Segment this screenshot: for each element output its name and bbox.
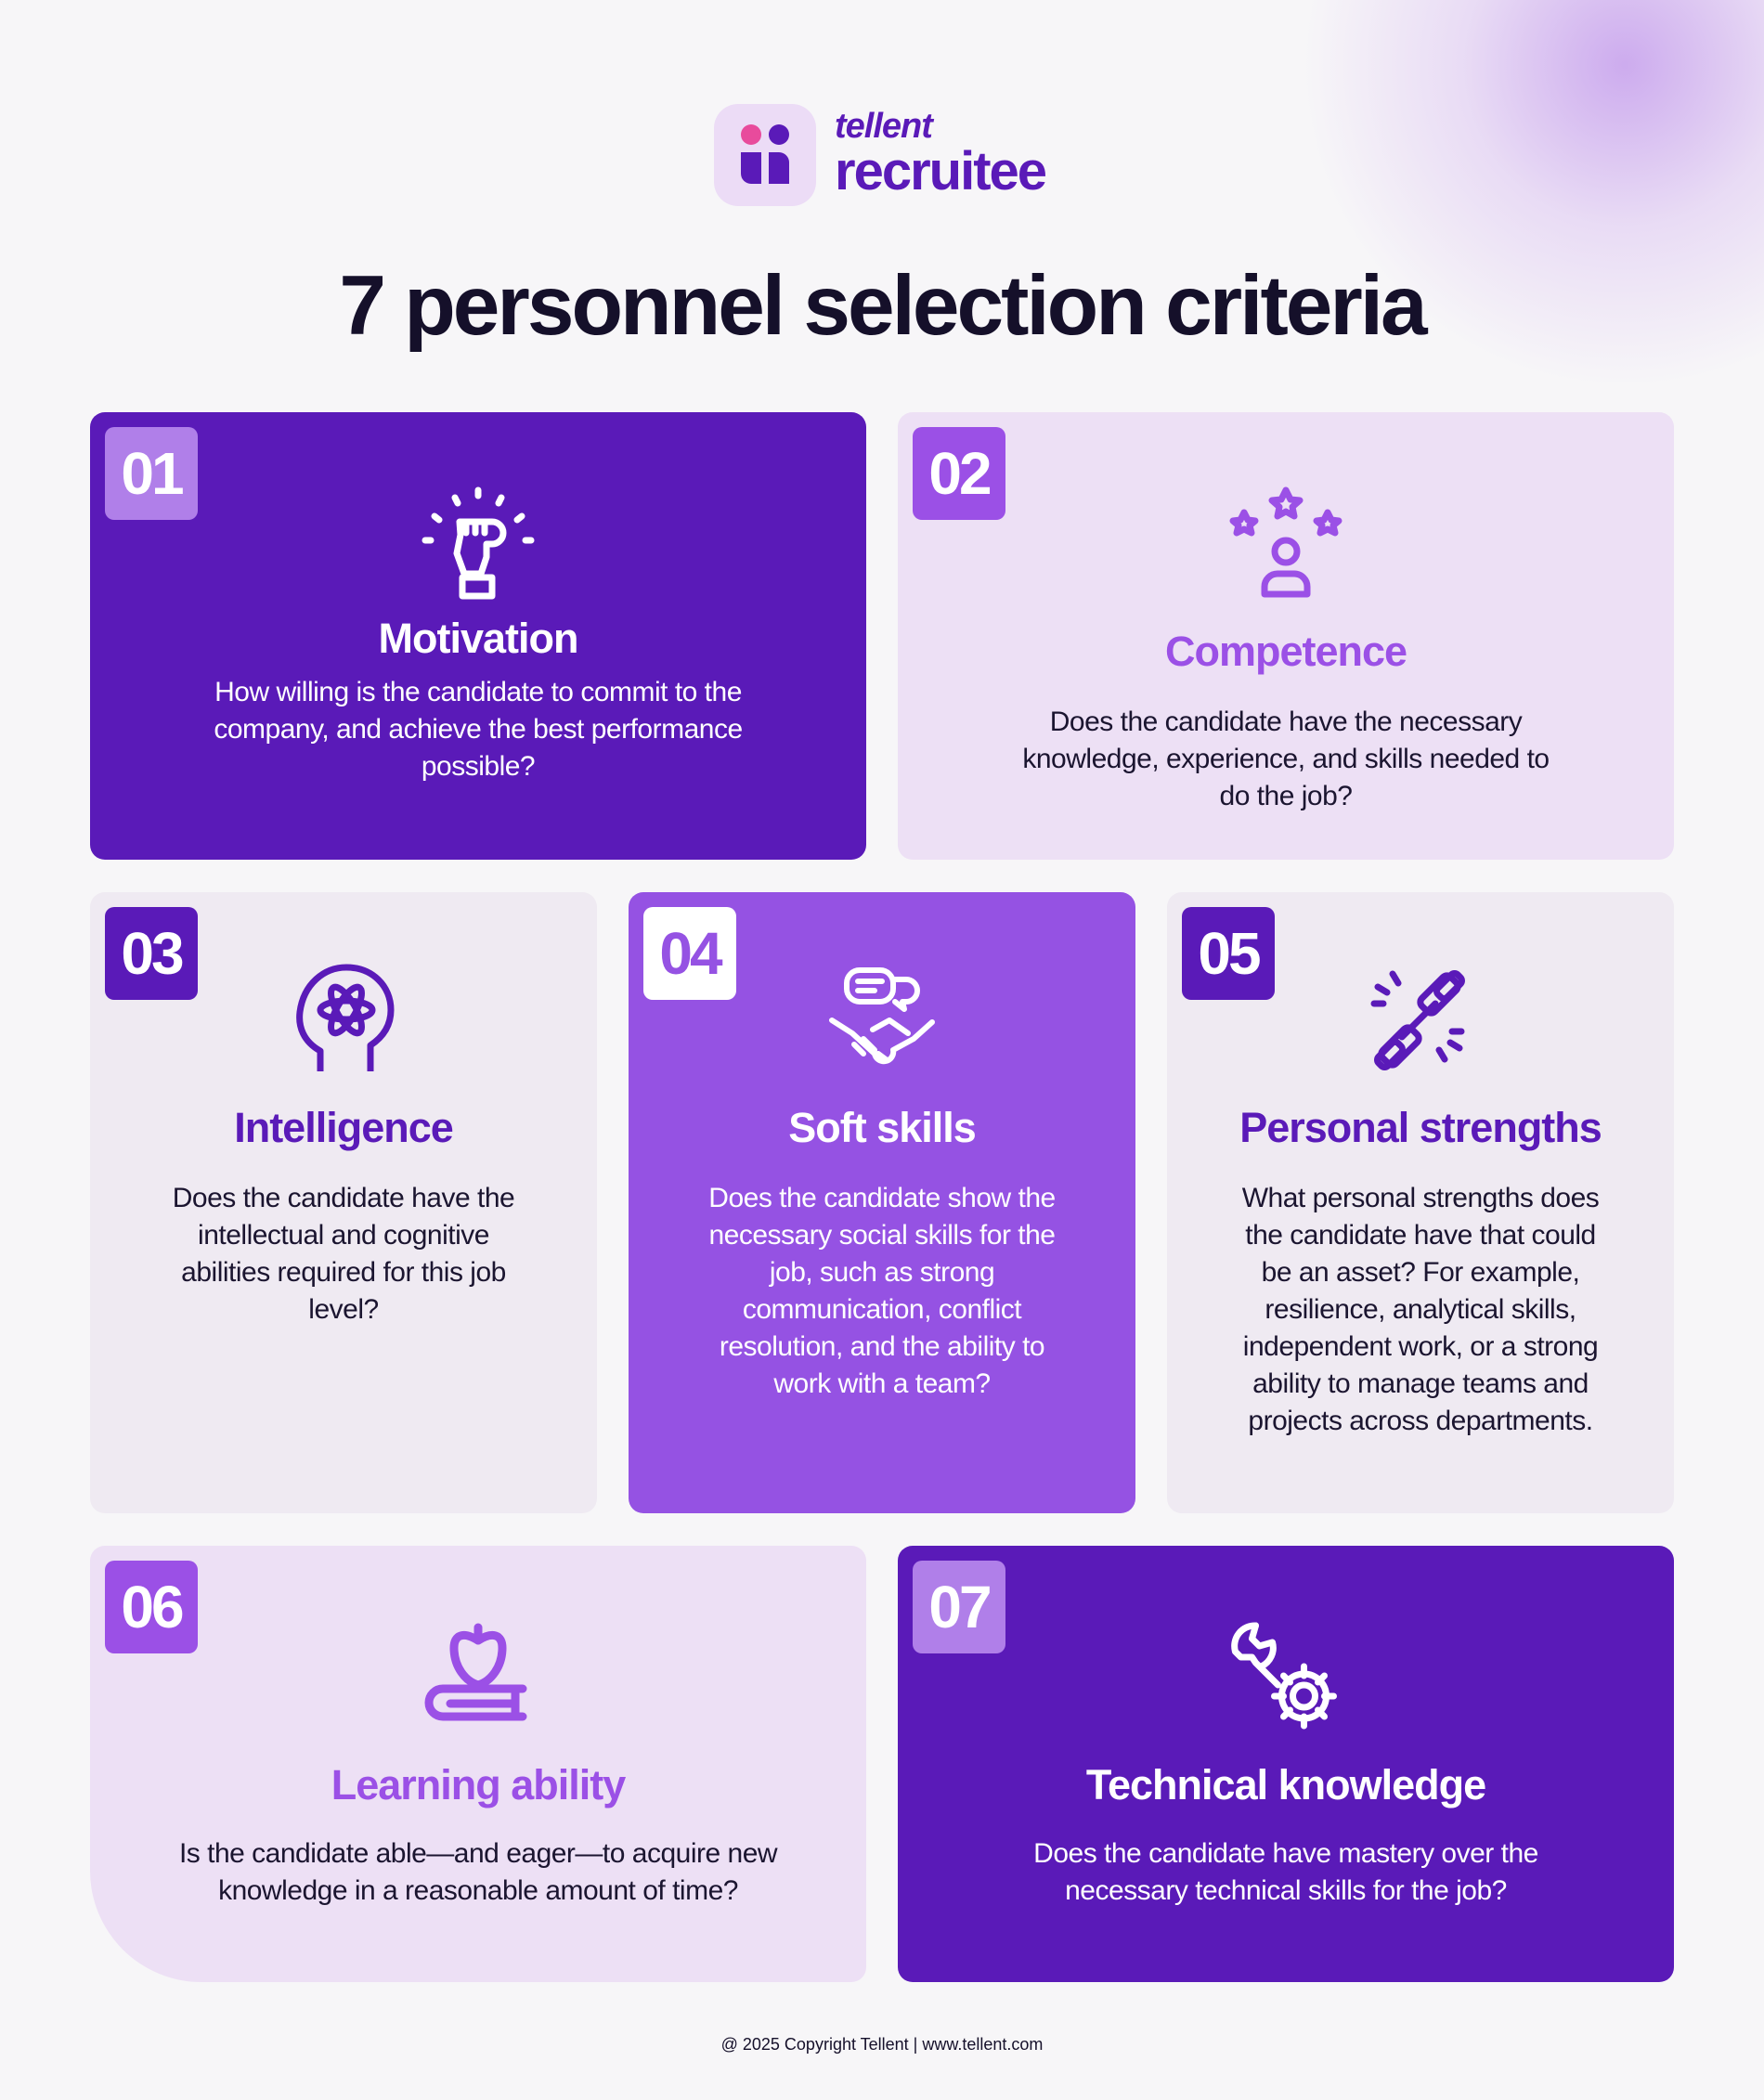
heading: Learning ability — [331, 1761, 625, 1808]
logo text: recruitee — [835, 141, 1045, 201]
text: How willing is the candidate to commit to the company, and achieve the best performance possible? — [214, 677, 743, 782]
logo — [714, 104, 1045, 206]
icon: apple on book — [425, 1623, 527, 1721]
badge 01 — [105, 427, 198, 520]
badge 03 — [105, 907, 198, 1000]
heading: Competence — [1165, 628, 1407, 675]
heading: Motivation — [379, 615, 577, 662]
text: Does the candidate have the intellectual and cognitive abilities required for this job level? — [173, 1183, 514, 1325]
panel: 03 Intelligence — [90, 892, 597, 1513]
footer: @ 2025 Copyright Tellent | www.tellent.com — [721, 2035, 1043, 2054]
badge 07 — [913, 1561, 1005, 1653]
badge 04: 04 — [659, 920, 720, 987]
badge 02: 02 — [928, 440, 990, 507]
badge 04 — [643, 907, 736, 1000]
badge 01: 01 — [121, 440, 182, 507]
text: Does the candidate have mastery over the necessary technical skills for the job? — [1033, 1838, 1538, 1906]
icon: handshake with chat — [829, 967, 935, 1064]
panel: 07 Technical knowledge — [898, 1546, 1674, 1982]
icon: fist — [422, 486, 535, 600]
heading: Technical knowledge — [1086, 1761, 1485, 1808]
text: Is the candidate able—and eager—to acquire new knowledge in a reasonable amount of time? — [179, 1838, 777, 1906]
icon: person with stars — [1229, 486, 1342, 598]
text: What personal strengths does the candidate have that could be an asset? For example, resilience, analytical skills, independent work, or a strong ability to manage teams and projects across departments. — [1242, 1183, 1599, 1436]
heading: Intelligence — [234, 1104, 453, 1151]
logo text — [835, 107, 1045, 201]
panel: 06 Learning ability — [90, 1546, 866, 1982]
icon: logo mark — [714, 104, 816, 206]
badge 02 — [913, 427, 1005, 520]
panel: 05 Personal strengths — [1167, 892, 1674, 1513]
badge 05 — [1182, 907, 1275, 1000]
panel: 02 Competence — [898, 412, 1674, 860]
heading: Soft skills — [788, 1104, 976, 1151]
badge 06 — [105, 1561, 198, 1653]
text: Does the candidate show the necessary social skills for the job, such as strong communication, conflict resolution, and the ability to work with a team? — [708, 1183, 1056, 1399]
panel: 04 Soft skills — [629, 892, 1135, 1513]
logo text: tellent — [835, 107, 932, 146]
badge 05: 05 — [1198, 920, 1259, 987]
icon: wrench and gear — [1231, 1623, 1337, 1729]
text: Does the candidate have the necessary knowledge, experience, and skills needed to do the job? — [1022, 706, 1550, 811]
badge 06: 06 — [121, 1574, 182, 1640]
title: 7 personnel selection criteria — [339, 259, 1425, 353]
heading: Personal strengths — [1239, 1104, 1602, 1151]
badge 03: 03 — [121, 920, 182, 987]
badge 07: 07 — [928, 1574, 990, 1640]
icon: dumbbell — [1370, 970, 1465, 1070]
icon: head with atom — [296, 964, 394, 1071]
panel: 01 Motivation — [90, 412, 866, 860]
